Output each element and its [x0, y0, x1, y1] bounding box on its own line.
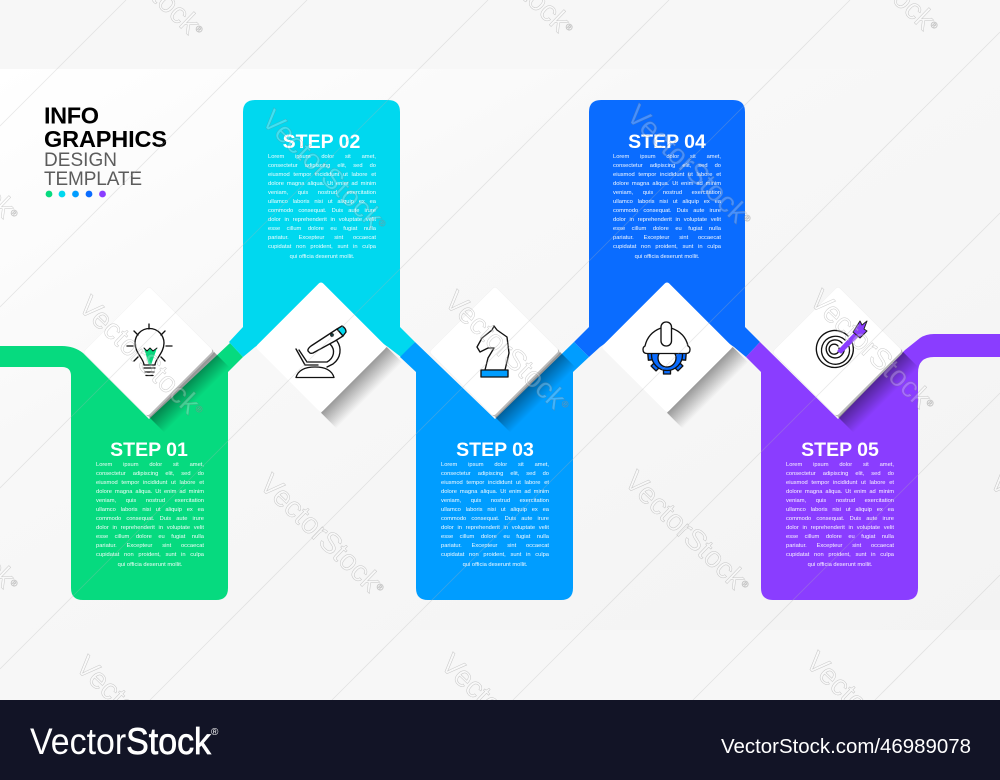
icon: microscope — [296, 326, 346, 378]
watermark overlay: ® — [555, 761, 567, 773]
text block: step 04: esse cillum dolore eu fugiat nulla — [613, 226, 721, 232]
diamond card: step 04 — [601, 281, 748, 428]
text block: step 05: qui officia deserunt mollit. — [808, 562, 872, 568]
text block: step 05: pariatur. Excepteur sint occaecat — [786, 543, 894, 549]
heading: step 03: STEP 03 — [456, 439, 534, 461]
text block: step 01: ullamco laboris nisi ut aliquip ex ea — [96, 507, 204, 513]
watermark overlay: ® — [193, 23, 205, 35]
watermark overlay: ® — [741, 212, 753, 224]
text block: step 01: dolore magna aliqua. Ut enim ad minim — [96, 489, 204, 495]
watermark overlay: ® — [8, 577, 20, 589]
text block: step 03: pariatur. Excepteur sint occaecat — [441, 543, 549, 549]
text block: step 01: Lorem ipsum dolor sit amet, — [96, 462, 204, 468]
text block: step 02: esse cillum dolore eu fugiat nulla — [268, 226, 376, 232]
text block: step 03: ullamco laboris nisi ut aliquip ex ea — [441, 507, 549, 513]
text block: step 04: eiusmod tempor incididunt ut labore et — [613, 172, 721, 178]
diamond card: step 05 — [772, 286, 919, 433]
text block: step 05: Lorem ipsum dolor sit amet, — [786, 462, 894, 468]
heading: step 05: STEP 05 — [801, 439, 879, 461]
watermark overlay: VectorStock — [255, 104, 389, 235]
watermark overlay: ® — [559, 398, 571, 410]
panel: step 04 — [574, 100, 760, 357]
text block: step 01: eiusmod tempor incididunt ut labore et — [96, 480, 204, 486]
title: INFO — [44, 102, 99, 128]
text block: step 03: commodo consequat. Duis aute irure — [441, 516, 549, 522]
title: GRAPHICS — [44, 126, 167, 152]
diamond card: step 02 — [255, 281, 402, 428]
text block: step 03: eiusmod tempor incididunt ut labore et — [441, 480, 549, 486]
text block: step 02: consectetur adipiscing elit, sed do — [268, 163, 376, 169]
icon: light bulb — [127, 324, 172, 376]
text block: step 03: veniam, quis nostrud exercitation — [441, 498, 549, 504]
text block: step 05: ullamco laboris nisi ut aliquip ex ea — [786, 507, 894, 513]
text block: step 02: Lorem ipsum dolor sit amet, — [268, 154, 376, 160]
text block: step 02: cupidatat non proident, sunt in culpa — [268, 244, 376, 250]
watermark overlay: ® — [928, 19, 940, 31]
watermark overlay: ® — [924, 397, 936, 409]
watermark overlay: VectorStock — [618, 465, 752, 596]
watermark overlay: VectorStock — [69, 650, 203, 780]
panel: step 03 — [400, 342, 589, 600]
watermark overlay: VectorStock — [434, 648, 568, 779]
text block: step 01: dolor in reprehenderit in voluptate velit — [96, 525, 204, 531]
diamond card: step 01 — [83, 286, 230, 433]
text block: step 02: commodo consequat. Duis aute irure — [268, 208, 376, 214]
text block: step 01 — [96, 460, 204, 572]
registered mark: ® — [211, 727, 219, 738]
watermark overlay: VectorStock — [438, 285, 572, 416]
footer logo: VectorStock — [30, 721, 211, 762]
text block: step 01: commodo consequat. Duis aute irure — [96, 516, 204, 522]
title: DESIGN — [44, 150, 117, 171]
text block: step 01: esse cillum dolore eu fugiat nulla — [96, 534, 204, 540]
text block: step 04 — [613, 152, 721, 264]
text block: step 04: veniam, quis nostrud exercitation — [613, 190, 721, 196]
heading: step 02: STEP 02 — [283, 131, 360, 153]
text block: step 02: ullamco laboris nisi ut aliquip ex ea — [268, 199, 376, 205]
watermark overlay: ® — [739, 578, 751, 590]
text block: step 03: consectetur adipiscing elit, sed do — [441, 471, 549, 477]
panel: step 05 — [746, 334, 1000, 600]
text block: step 04: dolore magna aliqua. Ut enim ad minim — [613, 181, 721, 187]
footer bar — [0, 700, 1000, 780]
text block: step 01: cupidatat non proident, sunt in culpa — [96, 552, 204, 558]
watermark overlay: VectorStock — [799, 646, 933, 777]
text block: step 05: dolore magna aliqua. Ut enim ad minim — [786, 489, 894, 495]
watermark overlay: ® — [920, 759, 932, 771]
text block: step 05: consectetur adipiscing elit, sed do — [786, 471, 894, 477]
text block: step 05: commodo consequat. Duis aute irure — [786, 516, 894, 522]
text block: step 03: esse cillum dolore eu fugiat nulla — [441, 534, 549, 540]
text block: step 05: esse cillum dolore eu fugiat nulla — [786, 534, 894, 540]
text block: step 01: veniam, quis nostrud exercitation — [96, 498, 204, 504]
text block: step 03: dolore magna aliqua. Ut enim ad minim — [441, 489, 549, 495]
text block: step 04: Lorem ipsum dolor sit amet, — [613, 154, 721, 160]
text block: step 05: dolor in reprehenderit in voluptate velit — [786, 525, 894, 531]
diamond card: step 03 — [429, 286, 576, 433]
watermark overlay: VectorStock — [253, 468, 387, 599]
text block: step 05: veniam, quis nostrud exercitation — [786, 498, 894, 504]
title: TEMPLATE — [44, 169, 142, 190]
text block: step 03: Lorem ipsum dolor sit amet, — [441, 462, 549, 468]
text block: step 04: commodo consequat. Duis aute irure — [613, 208, 721, 214]
panel: step 02 — [229, 100, 415, 357]
text block: step 04: pariatur. Excepteur sint occaecat — [613, 235, 721, 241]
text block: step 02: qui officia deserunt mollit. — [290, 254, 354, 260]
icon: target with arrow — [816, 321, 867, 367]
text block: step 01: qui officia deserunt mollit. — [118, 562, 182, 568]
text block: step 05 — [786, 460, 894, 572]
text block: step 02: dolore magna aliqua. Ut enim ad minim — [268, 181, 376, 187]
watermark overlay: ® — [8, 207, 20, 219]
heading: step 04: STEP 04 — [628, 131, 706, 153]
title — [44, 102, 167, 197]
text block: step 03: qui officia deserunt mollit. — [463, 562, 527, 568]
heading: step 01: STEP 01 — [110, 439, 188, 461]
text block: step 03: dolor in reprehenderit in voluptate velit — [441, 525, 549, 531]
legend dots — [46, 191, 106, 197]
watermark overlay: VectorStock — [803, 284, 937, 415]
icon: chess knight — [477, 326, 509, 377]
watermark overlay: ® — [563, 21, 575, 33]
text block: step 01: consectetur adipiscing elit, sed do — [96, 471, 204, 477]
panel: step 01 — [0, 343, 243, 600]
text block: step 04: cupidatat non proident, sunt in culpa — [613, 244, 721, 250]
text block: step 05: eiusmod tempor incididunt ut labore et — [786, 480, 894, 486]
text block: step 04: consectetur adipiscing elit, sed do — [613, 163, 721, 169]
watermark overlay: VectorStock — [620, 99, 754, 230]
watermark overlay: VectorStock — [72, 290, 206, 421]
text block: step 02: dolor in reprehenderit in voluptate velit — [268, 217, 376, 223]
text block: step 02: eiusmod tempor incididunt ut labore et — [268, 172, 376, 178]
text block: step 02 — [268, 152, 376, 264]
text block: step 03: cupidatat non proident, sunt in culpa — [441, 552, 549, 558]
watermark overlay: ® — [376, 217, 388, 229]
watermark overlay: ® — [374, 581, 386, 593]
text block: step 02: veniam, quis nostrud exercitation — [268, 190, 376, 196]
footer image id: VectorStock.com/46989078 — [721, 735, 971, 758]
text block: step 01: pariatur. Excepteur sint occaecat — [96, 543, 204, 549]
text block: step 04: qui officia deserunt mollit. — [635, 254, 699, 260]
text block: step 04: dolor in reprehenderit in voluptate velit — [613, 217, 721, 223]
text block: step 02: pariatur. Excepteur sint occaecat — [268, 235, 376, 241]
watermark overlay: ® — [190, 763, 202, 775]
icon: helmet with gear — [643, 322, 690, 374]
watermark overlay: ® — [193, 403, 205, 415]
text block: step 03 — [441, 460, 549, 572]
text block: step 05: cupidatat non proident, sunt in culpa — [786, 552, 894, 558]
text block: step 04: ullamco laboris nisi ut aliquip ex ea — [613, 199, 721, 205]
